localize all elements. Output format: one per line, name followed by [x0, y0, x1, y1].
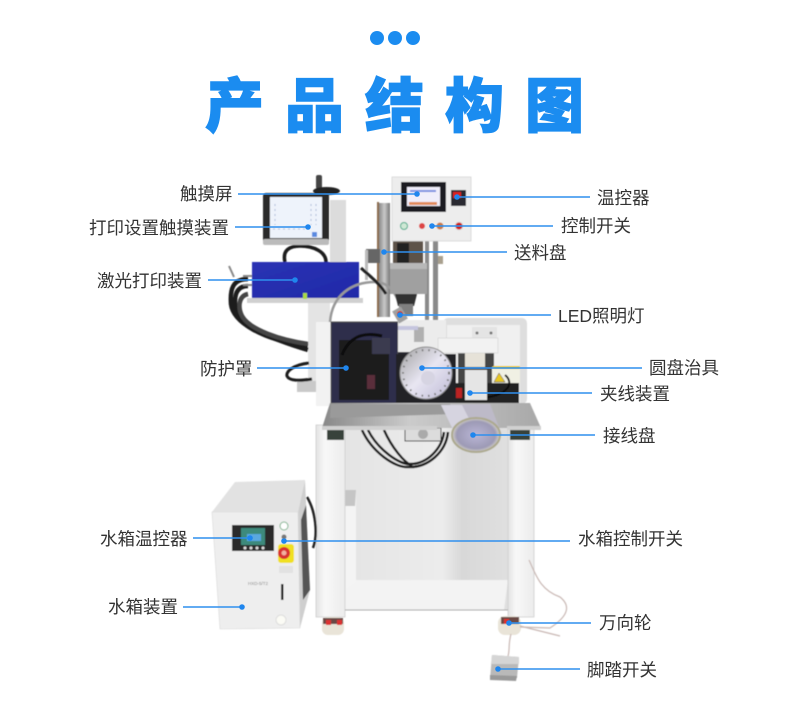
feed plate	[365, 202, 390, 317]
foot switch cables	[508, 560, 567, 656]
label: 夹线装置: 夹线装置	[600, 384, 670, 404]
cabinet feet	[322, 616, 521, 635]
label: 水箱控制开关	[281, 529, 683, 549]
label: 水箱装置	[108, 597, 245, 617]
label: 激光打印装置: 激光打印装置	[97, 271, 202, 291]
under-table bracket	[405, 428, 441, 441]
label: 水箱控制开关: 水箱控制开关	[578, 529, 683, 549]
label: 控制开关	[429, 216, 631, 236]
label: 圆盘治具: 圆盘治具	[649, 358, 719, 378]
laser cables	[231, 246, 326, 380]
control column rods	[393, 240, 443, 320]
label: 脚踏开关	[495, 660, 657, 680]
chiller control panel	[232, 525, 274, 551]
table top	[322, 403, 541, 440]
handwheel	[313, 175, 340, 195]
label: 脚踏开关: 脚踏开关	[587, 660, 657, 680]
label: 水箱温控器	[100, 529, 253, 549]
water chiller	[212, 480, 316, 629]
foot switch	[490, 655, 519, 681]
grey actuator box	[390, 263, 427, 316]
label: 温控器: 温控器	[597, 188, 650, 208]
label: 水箱装置: 水箱装置	[108, 597, 178, 617]
label: 触摸屏: 触摸屏	[180, 184, 232, 204]
chiller switches	[278, 522, 294, 573]
machine illustration	[212, 175, 567, 681]
label: 防护罩	[200, 359, 349, 379]
label: 水箱温控器: 水箱温控器	[100, 529, 188, 549]
touch monitor	[263, 193, 329, 245]
under-table cables	[362, 430, 448, 467]
title: 品	[285, 74, 344, 140]
white support column	[297, 200, 346, 406]
label: 温控器	[454, 188, 650, 208]
protective cover	[331, 322, 398, 406]
label: 触摸屏	[180, 184, 420, 204]
label: 送料盘: 送料盘	[514, 243, 566, 263]
label: 防护罩: 防护罩	[200, 359, 252, 379]
central white block	[392, 306, 498, 364]
label: 夹线装置	[467, 384, 670, 404]
label: 控制开关: 控制开关	[561, 216, 631, 236]
label: 圆盘治具	[419, 358, 719, 378]
decorative three dots	[370, 31, 420, 45]
label: LED照明灯: LED照明灯	[558, 306, 645, 326]
label: 接线盘	[470, 426, 656, 446]
label: 打印设置触摸装置: 打印设置触摸装置	[89, 218, 229, 238]
title	[205, 74, 584, 140]
disc fixture	[396, 347, 456, 406]
label: 万向轮: 万向轮	[599, 613, 652, 633]
label: 打印设置触摸装置	[89, 218, 311, 238]
control box	[392, 177, 471, 241]
title: 图	[525, 74, 584, 140]
label: 万向轮	[506, 613, 652, 633]
cabinet base	[316, 425, 534, 617]
label: 送料盘	[381, 243, 566, 263]
label: 接线盘: 接线盘	[603, 426, 656, 446]
fibre and feed cables	[330, 268, 403, 322]
title: 结	[365, 74, 424, 140]
label: LED照明灯	[397, 306, 645, 326]
wire collection bowl	[441, 404, 502, 452]
label: 激光打印装置	[97, 271, 298, 291]
title: 产	[205, 74, 264, 140]
title: 构	[445, 74, 504, 140]
right machine housing	[443, 318, 527, 404]
water chiller: HXD-5/T2	[248, 581, 269, 586]
laser print unit	[229, 262, 363, 303]
